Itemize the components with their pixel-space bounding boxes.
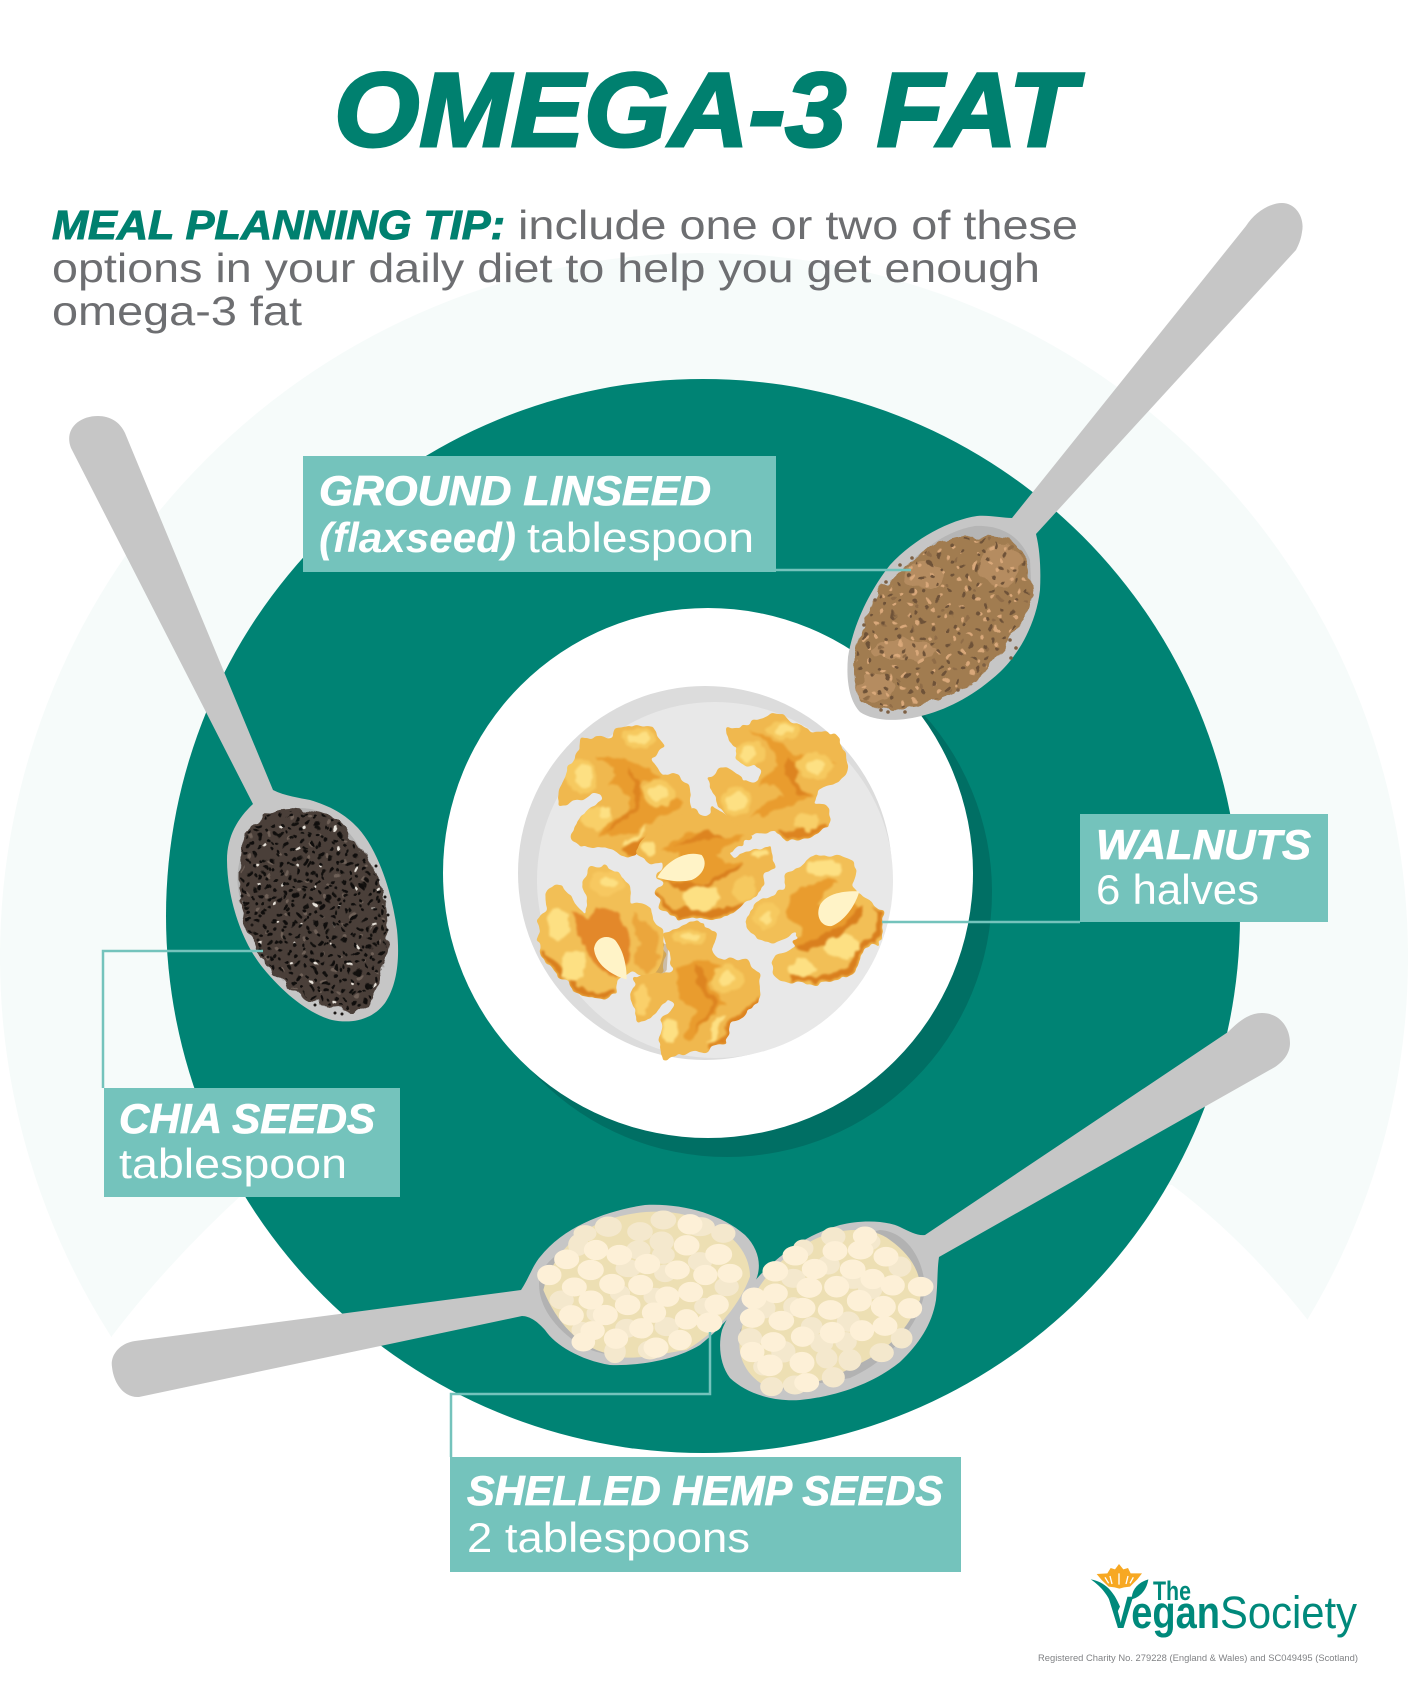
label: ground linseed — [303, 456, 776, 572]
label: chia seeds: CHIA SEEDS — [119, 1095, 375, 1142]
meal planning tip text: include one or two of these — [518, 202, 1078, 248]
label: ground linseed: tablespoon — [527, 514, 754, 561]
teal circle — [166, 379, 1240, 1453]
logo: The Vegan Society: The — [1153, 1576, 1191, 1606]
label: chia seeds — [104, 1088, 400, 1197]
walnut: centre — [638, 807, 773, 920]
linseed heap — [856, 538, 1029, 714]
hemp seeds right heap — [739, 1227, 933, 1395]
label: shelled hemp seeds: SHELLED HEMP SEEDS — [467, 1467, 943, 1514]
connector: ground linseed — [776, 569, 911, 571]
connector: hemp seeds — [451, 1332, 710, 1457]
chia seed heap — [240, 811, 390, 1016]
walnut: top right — [711, 713, 848, 840]
connector: walnuts — [882, 921, 1080, 923]
icon: leaves of the V — [1091, 1579, 1148, 1615]
spoon: chia seeds — [69, 416, 398, 1021]
label: walnuts: 6 halves — [1096, 866, 1259, 913]
dish with walnuts — [518, 686, 893, 1060]
walnut: top left — [560, 728, 690, 854]
logo: The Vegan Society: Society — [1220, 1587, 1357, 1638]
label: ground linseed: GROUND LINSEED — [319, 467, 711, 514]
icon: orange flower — [1097, 1564, 1142, 1589]
meal planning tip text: omega-3 fat — [52, 288, 303, 334]
label: shelled hemp seeds — [450, 1457, 961, 1572]
almond piece — [818, 891, 859, 926]
meal planning tip text: MEAL PLANNING TIP: — [52, 202, 505, 248]
meal planning tip text: options in your daily diet to help you get enough — [52, 245, 1040, 291]
label: walnuts: WALNUTS — [1096, 821, 1311, 868]
connector: chia seeds — [103, 951, 263, 1088]
logo: The Vegan Society — [1091, 1564, 1357, 1638]
white plate — [443, 608, 973, 1138]
almond piece — [594, 937, 627, 979]
walnut: bottom centre — [632, 922, 760, 1057]
spoon: hemp seeds right — [720, 1013, 1290, 1400]
hemp seeds left heap — [538, 1211, 750, 1362]
label: walnuts — [1080, 814, 1328, 922]
logo: The Vegan Society: Vegan — [1108, 1587, 1220, 1638]
almond piece — [657, 854, 705, 881]
title: OMEGA-3 FAT — [334, 52, 1084, 169]
label: chia seeds: tablespoon — [119, 1140, 347, 1187]
label: ground linseed: (flaxseed) — [319, 514, 516, 561]
spoon: hemp seeds left — [112, 1205, 759, 1397]
spoon: ground linseed — [847, 203, 1303, 720]
meal planning tip text — [52, 202, 1078, 334]
walnut: right — [747, 857, 883, 983]
walnut: bottom left — [538, 865, 663, 1000]
label: shelled hemp seeds: 2 tablespoons — [467, 1514, 750, 1561]
plate shadow — [462, 627, 992, 1157]
charity registration text: Registered Charity No. 279228 (England & Wales) and SC049495 (Scotland) — [1038, 1653, 1358, 1664]
